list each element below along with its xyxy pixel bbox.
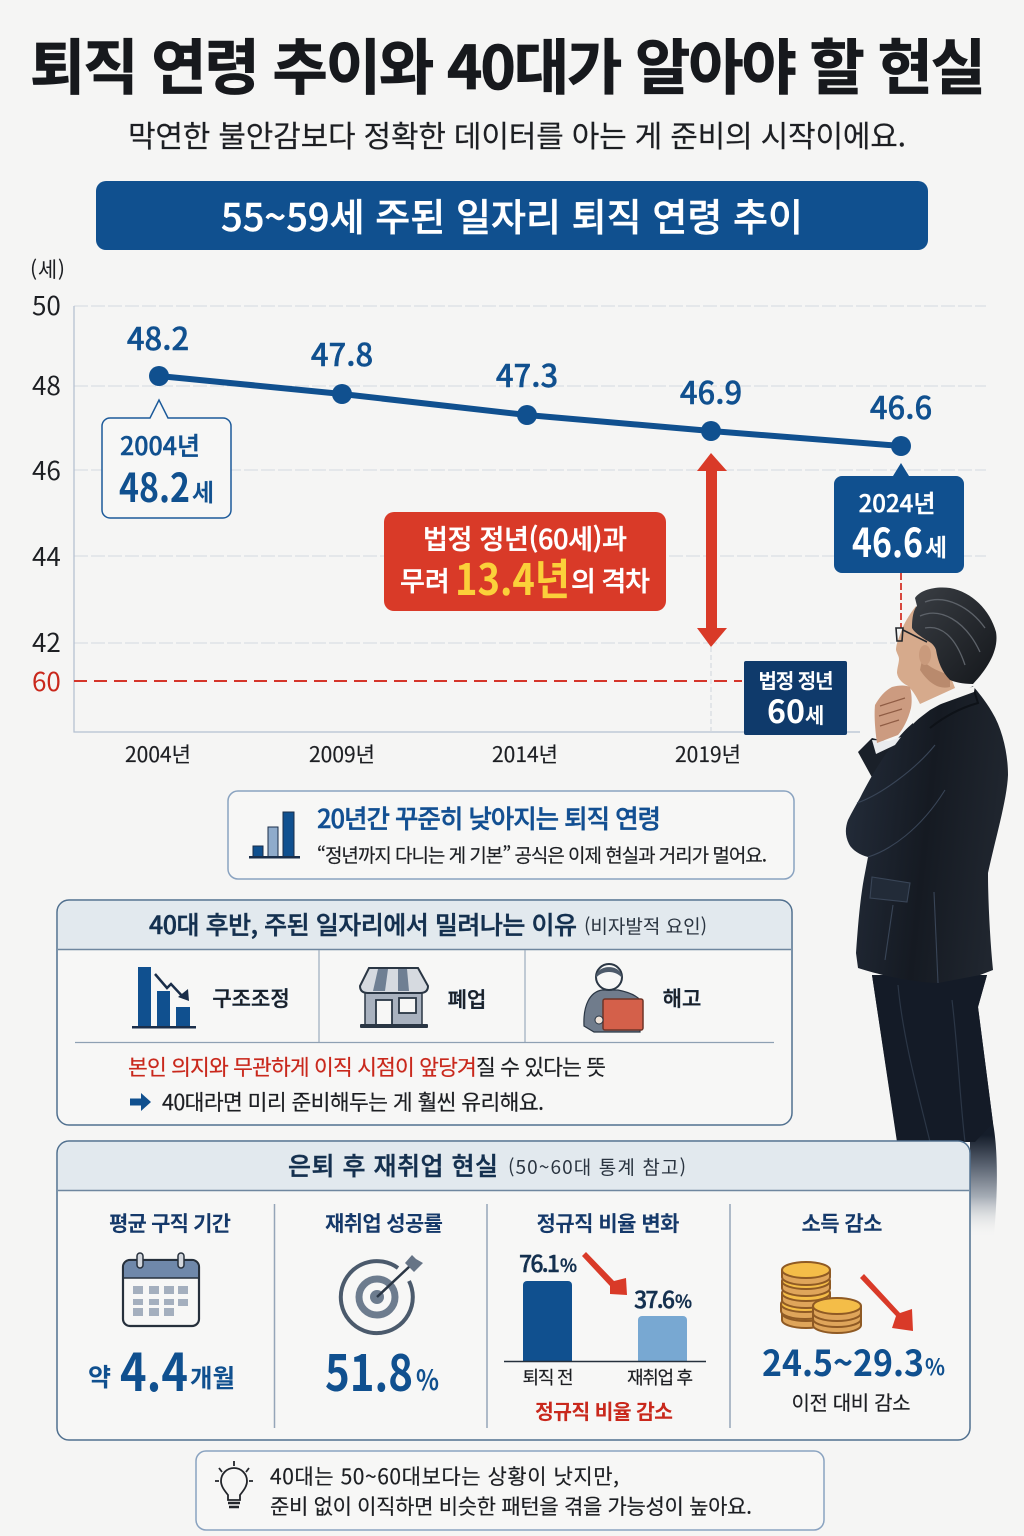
legal retirement dashed line bbox=[74, 680, 742, 682]
trousers bbox=[872, 975, 997, 1235]
bar chart: ratio before and after: % bbox=[675, 1288, 692, 1314]
label: restructuring: 구조조정 bbox=[212, 983, 290, 1013]
glasses bbox=[896, 628, 927, 642]
label: dismissal: 해고 bbox=[663, 983, 701, 1013]
x axis labels: 2009년 bbox=[309, 739, 375, 769]
callout: 2004: 2004년 bbox=[120, 427, 200, 463]
section heading banner bbox=[96, 181, 928, 250]
panel: re-employment reality bbox=[57, 1141, 970, 1440]
x axis labels: 2004년 bbox=[125, 739, 191, 769]
y axis labels: 44 bbox=[32, 537, 61, 574]
y axis labels: 42 bbox=[32, 623, 61, 660]
stat: income decrease bbox=[762, 1208, 945, 1416]
hand bbox=[875, 686, 912, 743]
dashed drop line from 2024 bbox=[900, 573, 902, 628]
callout: 2024: 세 bbox=[925, 528, 947, 563]
panel header bbox=[58, 1142, 969, 1190]
jacket bbox=[846, 686, 1008, 983]
hair bbox=[912, 587, 996, 684]
stat: average job search period bbox=[88, 1208, 235, 1406]
axis unit label: (세) bbox=[30, 254, 65, 284]
callout: 2024: 2024년 bbox=[859, 484, 935, 519]
icon: bar chart bbox=[249, 812, 300, 858]
callout: 20 year decline summary bbox=[228, 791, 794, 879]
stat: re-employment success rate bbox=[325, 1208, 443, 1406]
stat: regular employment ratio bbox=[504, 1208, 706, 1425]
ear bbox=[919, 645, 931, 665]
callout: 13.4 year gap: 법정 정년(60세)과 bbox=[423, 518, 627, 557]
arrow: income down bbox=[860, 1274, 913, 1331]
explanation text: 본인 의지와 무관하게 이직 시점이 앞당겨질 수 있다는 뜻 bbox=[128, 1051, 606, 1082]
neck and face bbox=[896, 606, 955, 704]
trend line bbox=[149, 366, 911, 456]
panel header: (50~60대 통계 참고) bbox=[508, 1153, 686, 1180]
bar chart: ratio before and after: 76.1 bbox=[519, 1245, 560, 1279]
bar chart: ratio before and after bbox=[504, 1245, 706, 1390]
stat: regular employment ratio: 정규직 비율 감소 bbox=[535, 1395, 673, 1425]
icon: coin stacks bbox=[781, 1262, 861, 1333]
stat: average job search period: 4.4 bbox=[120, 1331, 188, 1406]
icon: target with arrow bbox=[341, 1255, 423, 1333]
bar chart: ratio before and after: 퇴직 전 bbox=[522, 1364, 574, 1390]
jacket details bbox=[857, 687, 978, 983]
label: business closure: 폐업 bbox=[448, 984, 486, 1014]
callout: 2024 bbox=[834, 463, 964, 573]
callout: 20 year decline summary: 20년간 꾸준히 낮아지는 퇴직 연령 bbox=[317, 799, 661, 836]
x axis labels: 2014년 bbox=[492, 739, 558, 769]
label: legal retirement age 60: 법정 정년 bbox=[758, 665, 834, 694]
stat: income decrease: 소득 감소 bbox=[802, 1208, 882, 1238]
y axis labels bbox=[32, 286, 61, 699]
y axis labels: 46 bbox=[32, 451, 61, 488]
panel header bbox=[58, 901, 791, 950]
callout: 13.4 year gap: 13.4년 bbox=[455, 546, 570, 608]
label: legal retirement age 60: 60 bbox=[767, 687, 805, 733]
stat: income decrease: 이전 대비 감소 bbox=[792, 1387, 910, 1416]
section heading banner: 55~59세 주된 일자리 퇴직 연령 추이 bbox=[221, 187, 803, 242]
stat: income decrease: 24.5~29.3 bbox=[762, 1335, 924, 1387]
panel header: (비자발적 요인) bbox=[584, 912, 707, 939]
bar chart: ratio before and after: 재취업 후 bbox=[627, 1364, 693, 1390]
x axis labels bbox=[125, 739, 741, 769]
callout: 2004: 세 bbox=[192, 473, 214, 508]
data values: 47.3 bbox=[496, 351, 558, 396]
callout: 2004: 48.2 bbox=[119, 456, 190, 514]
callout: 13.4 year gap bbox=[384, 512, 666, 611]
callout: tip for people in their 40s bbox=[196, 1451, 824, 1530]
arrow: gap between retirement ages bbox=[697, 453, 727, 647]
icon: calendar bbox=[123, 1253, 199, 1326]
icon: closed store bbox=[360, 968, 428, 1028]
illustration: man in suit looking at chart bbox=[846, 587, 1008, 1235]
callout: 2004 bbox=[102, 400, 231, 518]
subtitle: 막연한 불안감보다 정확한 데이터를 아는 게 준비의 시작이에요. bbox=[128, 112, 906, 156]
label: legal retirement age 60: 세 bbox=[805, 700, 824, 730]
callout: tip for people in their 40s: 40대는 50~60대보다는 상황이 낫지만, bbox=[270, 1461, 619, 1491]
data values: 46.6 bbox=[870, 383, 932, 428]
icon: laid-off worker with box bbox=[584, 964, 643, 1032]
bar chart: ratio before and after: % bbox=[560, 1252, 577, 1278]
data values: 47.8 bbox=[311, 330, 373, 375]
callout: 13.4 year gap: 무려 bbox=[400, 560, 450, 599]
stat: average job search period: 개월 bbox=[190, 1359, 235, 1395]
y axis labels: 48 bbox=[32, 366, 61, 403]
callout: tip for people in their 40s: 준비 없이 이직하면 비슷한 패턴을 겪을 가능성이 높아요. bbox=[270, 1491, 752, 1521]
data values: 46.9 bbox=[680, 368, 742, 413]
callout: 2024: 46.6 bbox=[852, 511, 923, 569]
x axis labels: 2019년 bbox=[675, 739, 741, 769]
arrow: decrease bbox=[582, 1252, 627, 1295]
title: 퇴직 연령 추이와 40대가 알아야 할 현실 bbox=[30, 20, 986, 107]
stat: average job search period: 약 bbox=[88, 1358, 111, 1394]
panel header: 은퇴 후 재취업 현실 bbox=[288, 1147, 498, 1183]
label: legal retirement age 60 bbox=[744, 661, 847, 735]
y axis labels: 50 bbox=[32, 286, 61, 323]
callout: 13.4 year gap: 의 격차 bbox=[571, 560, 650, 599]
stat: re-employment success rate: % bbox=[416, 1359, 439, 1399]
explanation text bbox=[128, 1051, 606, 1117]
data values bbox=[127, 314, 932, 428]
stat: regular employment ratio: 정규직 비율 변화 bbox=[536, 1208, 680, 1238]
panel: reasons for being pushed out bbox=[57, 900, 792, 1125]
callout: 20 year decline summary: “정년까지 다니는 게 기본” 공식은 이제 현실과 거리가 멀어요. bbox=[317, 841, 767, 868]
stat: average job search period: 평균 구직 기간 bbox=[109, 1208, 231, 1238]
panel header: 40대 후반, 주된 일자리에서 밀려나는 이유 bbox=[149, 906, 577, 942]
shirt and cuff bbox=[911, 686, 975, 724]
line chart: retirement age trend bbox=[30, 254, 986, 769]
y axis labels: 60 bbox=[32, 662, 61, 699]
stat: re-employment success rate: 재취업 성공률 bbox=[325, 1208, 443, 1238]
bar chart: ratio before and after: 37.6 bbox=[634, 1281, 675, 1315]
stat: income decrease: % bbox=[925, 1350, 945, 1382]
chart grid bbox=[74, 306, 986, 732]
icon: light bulb bbox=[215, 1461, 253, 1507]
icon: restructuring bars bbox=[132, 967, 196, 1028]
rear arm bbox=[858, 738, 900, 792]
data values: 48.2 bbox=[127, 314, 189, 359]
explanation text: 40대라면 미리 준비해두는 게 훨씬 유리해요. bbox=[162, 1086, 544, 1117]
stat: re-employment success rate: 51.8 bbox=[325, 1334, 413, 1406]
